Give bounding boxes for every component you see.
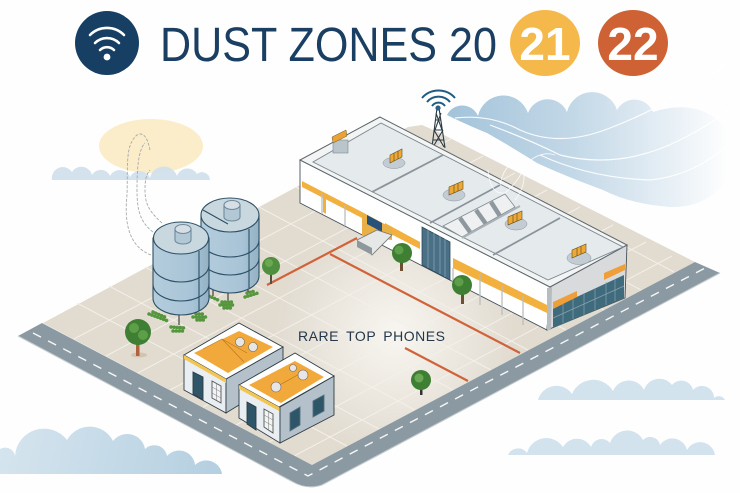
rooftop unit 3 [443, 181, 465, 201]
ground plot [43, 125, 695, 465]
cloud right upper [538, 379, 725, 400]
side wall [547, 245, 627, 330]
roof domes [236, 338, 258, 352]
tree 1 [125, 319, 151, 358]
badge: 22 [598, 10, 668, 76]
door [193, 372, 203, 400]
glass atrium [422, 227, 450, 280]
storage tank rear [201, 198, 259, 308]
cloud right lower [508, 431, 715, 455]
yellow dust haze [99, 119, 203, 173]
side wall glazing [553, 264, 625, 328]
tree 5 [411, 370, 431, 395]
main building [300, 117, 627, 330]
door [247, 402, 256, 430]
title header [75, 10, 668, 76]
antenna tower [422, 91, 455, 148]
small building right [239, 353, 334, 443]
small building left [184, 323, 283, 413]
tank legs and shrubs [149, 312, 208, 331]
badge: 22: 22 [607, 18, 659, 70]
storefront orange bands [302, 181, 547, 313]
tree 4 [452, 275, 472, 304]
road centre dashes [33, 267, 707, 476]
tower wifi arcs [422, 91, 455, 106]
left small cloud [52, 167, 210, 180]
badge: 21: 21 [519, 18, 571, 70]
cloud bottom left [0, 427, 222, 474]
corner pillar [547, 287, 552, 330]
tree 2 [262, 257, 280, 284]
rooftop unit 5 [567, 244, 591, 264]
title text: DUST ZONES 20 [160, 19, 497, 72]
window [264, 409, 273, 433]
dust swirl over roof [488, 154, 555, 200]
rooftop unit 1 [332, 130, 348, 153]
skylight [443, 194, 520, 238]
paving grid [74, 130, 674, 456]
storage tank front [149, 222, 209, 331]
entrance [357, 212, 392, 255]
roof dividers [372, 155, 560, 255]
window mullions [322, 194, 523, 325]
road [18, 262, 720, 487]
front wall [300, 160, 550, 330]
badge: 21 [510, 10, 580, 76]
roof [300, 117, 627, 287]
side windows [290, 395, 324, 431]
rooftop unit 4 [505, 211, 527, 230]
upper right dust cloud [447, 65, 738, 207]
rooftop unit 2 [383, 149, 405, 168]
zone label: RARE TOP PHONES [298, 328, 445, 344]
roof domes [271, 364, 308, 392]
window [212, 381, 221, 403]
tree 3 [392, 243, 412, 271]
dust trails to tanks [126, 134, 162, 255]
orange zone lines [267, 238, 520, 381]
icon: wifi badge [75, 11, 139, 75]
tank legs and shrubs [209, 285, 258, 308]
